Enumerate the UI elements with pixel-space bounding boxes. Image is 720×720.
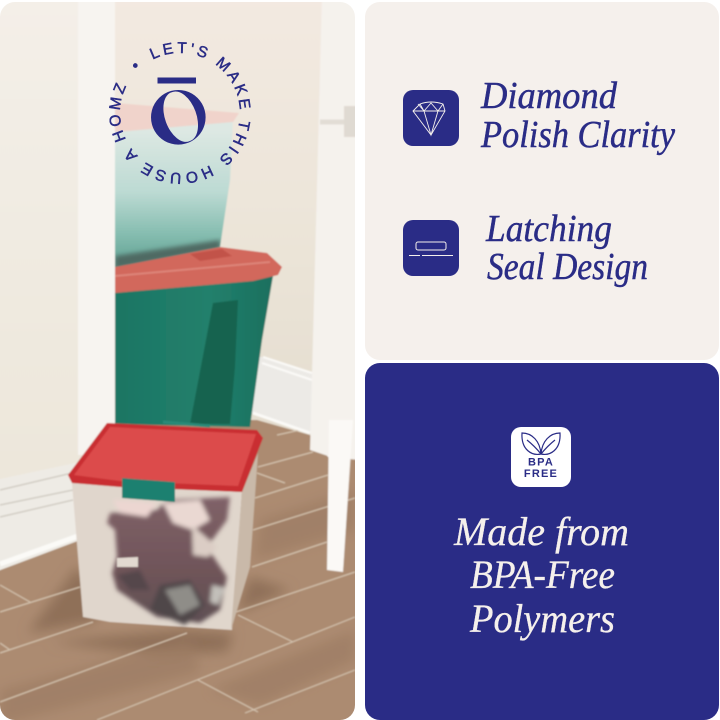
icon: latching seal <box>403 220 459 276</box>
icon: bpa free: BPA <box>528 456 554 468</box>
badge: let's make this house a homz <box>109 42 251 184</box>
panel: bpa free <box>365 363 719 720</box>
tote: clear tote with red lid <box>68 422 263 630</box>
tote: green stacked tote <box>115 247 282 427</box>
icon: diamond <box>403 90 459 146</box>
back wall <box>110 0 325 435</box>
text: diamond polish clarity: Polish Clarity <box>480 114 675 156</box>
text: made from bpa-free polymers: Made from <box>453 509 629 554</box>
logo ring <box>151 90 206 145</box>
text: made from bpa-free polymers: Polymers <box>469 596 615 641</box>
text: made from bpa-free polymers <box>453 509 629 641</box>
icon: bpa free: FREE <box>524 468 558 480</box>
text: latching seal design: Seal Design <box>487 246 648 288</box>
left wall <box>0 0 85 495</box>
panel: features <box>365 2 719 360</box>
logo bar <box>158 78 196 84</box>
white post <box>327 420 353 572</box>
text: latching seal design <box>485 208 648 288</box>
icon: bpa free <box>511 427 571 487</box>
text: latching seal design: Latching <box>485 208 612 250</box>
door trim right <box>310 0 360 460</box>
text: diamond polish clarity: Diamond <box>480 75 618 117</box>
door trim left <box>78 0 115 455</box>
circular slogan: LET'S MAKE THIS HOUSE A HOMZ • <box>109 42 251 184</box>
left baseboard <box>0 462 80 572</box>
door hinge <box>320 120 345 124</box>
text: diamond polish clarity <box>480 75 675 156</box>
right baseboard <box>252 355 312 434</box>
tote: top faded tote <box>115 103 239 269</box>
wood floor <box>0 420 360 720</box>
text: made from bpa-free polymers: BPA-Free <box>470 552 615 597</box>
panel: product photo <box>0 2 355 720</box>
